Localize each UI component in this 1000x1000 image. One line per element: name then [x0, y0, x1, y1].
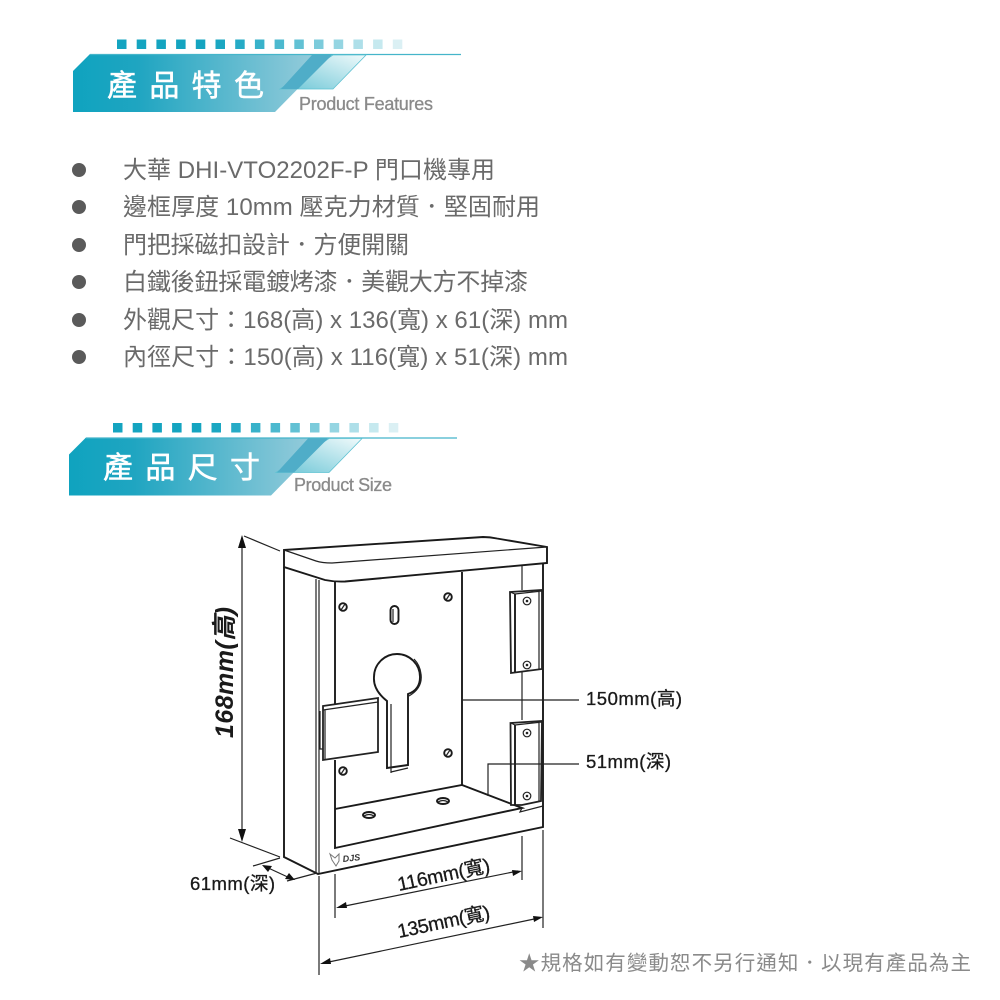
dark parallelogram — [281, 55, 332, 89]
dimension: 51mm depth leader — [488, 751, 671, 796]
brand logo — [330, 852, 361, 866]
banner — [73, 54, 332, 112]
light parallelogram — [280, 55, 366, 89]
box body — [284, 537, 547, 874]
banner — [69, 438, 328, 496]
dimension: 61mm depth: 61mm(深) — [190, 873, 275, 894]
dimension: 168mm height — [211, 535, 280, 857]
dimension: 116mm width: 116mm(寬) — [395, 855, 492, 896]
item 6: 內徑尺寸：150(高) x 116(寬) x 51(深) mm — [123, 344, 568, 371]
section header: product size — [69, 423, 457, 496]
feature list — [72, 157, 568, 371]
top slot — [390, 606, 398, 624]
light parallelogram — [276, 438, 362, 472]
magnet tab — [320, 698, 378, 760]
dark parallelogram — [277, 438, 328, 472]
subheading: Product Size — [294, 475, 392, 495]
upper hinge bracket — [510, 590, 542, 673]
dimension: 51mm depth leader: 51mm(深) — [586, 751, 671, 772]
footnote: ★規格如有變動恕不另行通知．以現有產品為主 — [519, 952, 971, 975]
dimension: 135mm width: 135mm(寬) — [395, 902, 492, 943]
product dimension diagram — [190, 535, 682, 975]
dimension: 135mm width — [319, 830, 543, 975]
banner rule — [86, 437, 457, 439]
item 1: 大華 DHI-VTO2202F-P 門口機專用 — [123, 157, 495, 184]
dimension: 61mm depth — [190, 858, 317, 894]
banner rule — [90, 54, 461, 56]
dimension: 168mm height: 168mm(高) — [211, 607, 239, 738]
lower hinge bracket — [510, 721, 542, 805]
screws on back panel — [339, 593, 452, 775]
item 2: 邊框厚度 10mm 壓克力材質．堅固耐用 — [123, 194, 540, 221]
dimension: 116mm width — [335, 836, 522, 918]
heading: 產品尺寸 — [103, 452, 260, 485]
dimension: 150mm height leader: 150mm(高) — [586, 688, 682, 709]
floor holes — [363, 798, 449, 818]
progress squares — [113, 423, 398, 432]
heading: 產品特色 — [107, 70, 264, 103]
progress squares — [117, 40, 402, 49]
section header: product features — [73, 40, 461, 114]
item 5: 外觀尺寸：168(高) x 136(寬) x 61(深) mm — [123, 307, 568, 334]
item 4: 白鐵後鈕採電鍍烤漆．美觀大方不掉漆 — [123, 269, 528, 296]
keyhole cutout — [374, 654, 421, 773]
item 3: 門把採磁扣設計．方便開關 — [123, 232, 409, 259]
subheading: Product Features — [299, 94, 433, 114]
brand logo: DJS — [342, 852, 361, 864]
